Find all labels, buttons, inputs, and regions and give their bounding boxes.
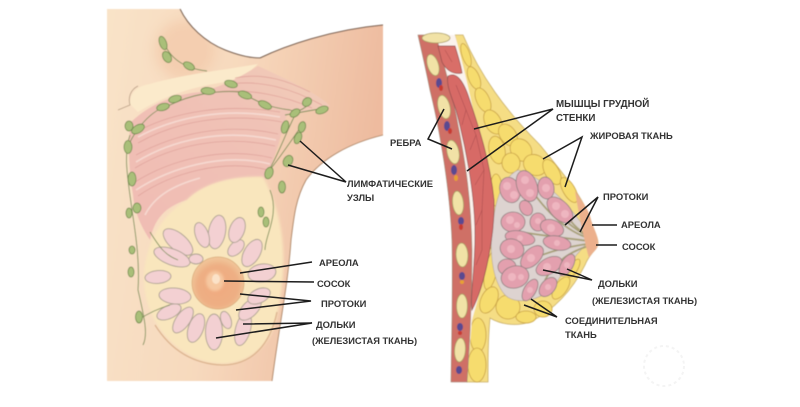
chest muscle pointers <box>467 109 553 171</box>
chest wall gap <box>436 35 490 382</box>
rib wall <box>418 35 472 382</box>
label: side lobules: (ЖЕЛЕЗИСТАЯ ТКАНЬ) <box>592 296 697 306</box>
armpit line <box>272 135 383 381</box>
fatty tissue pointers <box>543 137 582 187</box>
shoulder crease <box>118 86 138 110</box>
intercostal vessels <box>436 78 465 374</box>
label: fatty tissue: ЖИРОВАЯ ТКАНЬ <box>589 130 673 141</box>
label: lymph nodes: УЗЛЫ <box>347 192 374 203</box>
glandular lobules section <box>496 168 578 303</box>
label: side areola: АРЕОЛА <box>621 219 661 230</box>
neck shading <box>155 20 215 80</box>
panel: side cross-section of breast <box>418 33 598 382</box>
fat layer <box>455 35 598 382</box>
label: chest wall muscles: МЫШЦЫ ГРУДНОЙ <box>556 99 649 110</box>
muscle fibres <box>135 76 322 196</box>
side lobules pointer <box>543 269 592 280</box>
lymph node pointers <box>288 141 346 182</box>
upper muscle <box>438 46 462 73</box>
label: lobules: (ЖЕЛЕЗИСТАЯ ТКАНЬ) <box>312 336 417 346</box>
label: side ducts: ПРОТОКИ <box>603 191 649 202</box>
lobule highlights <box>503 176 570 293</box>
rib pointers <box>428 109 452 149</box>
side nipple pointer <box>596 244 617 246</box>
label: side lobules: ДОЛЬКИ <box>598 278 638 289</box>
clavicle highlight <box>130 64 258 112</box>
nipple <box>206 271 224 291</box>
pectoralis major <box>448 75 494 310</box>
label: lobules: ДОЛЬКИ <box>316 319 356 330</box>
pectoral muscle <box>129 66 330 240</box>
breast mound <box>144 177 283 364</box>
muscle texture <box>445 50 484 265</box>
lobules pointer <box>216 323 312 338</box>
ribs <box>422 33 469 362</box>
pointer lines <box>216 109 617 338</box>
neck line <box>180 9 383 58</box>
lymphatic vessels <box>126 40 325 345</box>
label: chest wall muscles: СТЕНКИ <box>556 113 595 124</box>
label: side nipple: СОСОК <box>622 241 656 252</box>
connective tissue pointers <box>524 299 557 317</box>
ducts pointer <box>236 294 311 310</box>
skin silhouette <box>107 9 383 381</box>
breast lower contour <box>155 312 277 365</box>
side areola pointer <box>592 224 617 226</box>
fat lobules <box>458 42 582 382</box>
label: ribs: РЕБРА <box>390 137 422 148</box>
side duct pointers <box>565 197 598 232</box>
glandular lobules <box>144 214 277 350</box>
areola side <box>575 191 598 258</box>
panel: front view of breast and armpit <box>107 9 383 381</box>
areola <box>192 257 244 309</box>
areola pointer <box>240 262 312 273</box>
label: lymph nodes: ЛИМФАТИЧЕСКИЕ <box>347 178 433 189</box>
label: areola: АРЕОЛА <box>319 257 359 268</box>
gland background <box>491 170 592 301</box>
label: ducts: ПРОТОКИ <box>321 298 367 309</box>
nipple pointer <box>224 281 314 282</box>
pale muscle streaks <box>136 113 280 215</box>
lymph nodes <box>124 35 329 323</box>
label: connective tissue: ТКАНЬ <box>565 329 597 340</box>
milk ducts <box>520 195 596 280</box>
label: nipple: СОСОК <box>317 278 351 289</box>
watermark <box>644 346 684 386</box>
label: connective tissue: СОЕДИНИТЕЛЬНАЯ <box>565 315 658 326</box>
